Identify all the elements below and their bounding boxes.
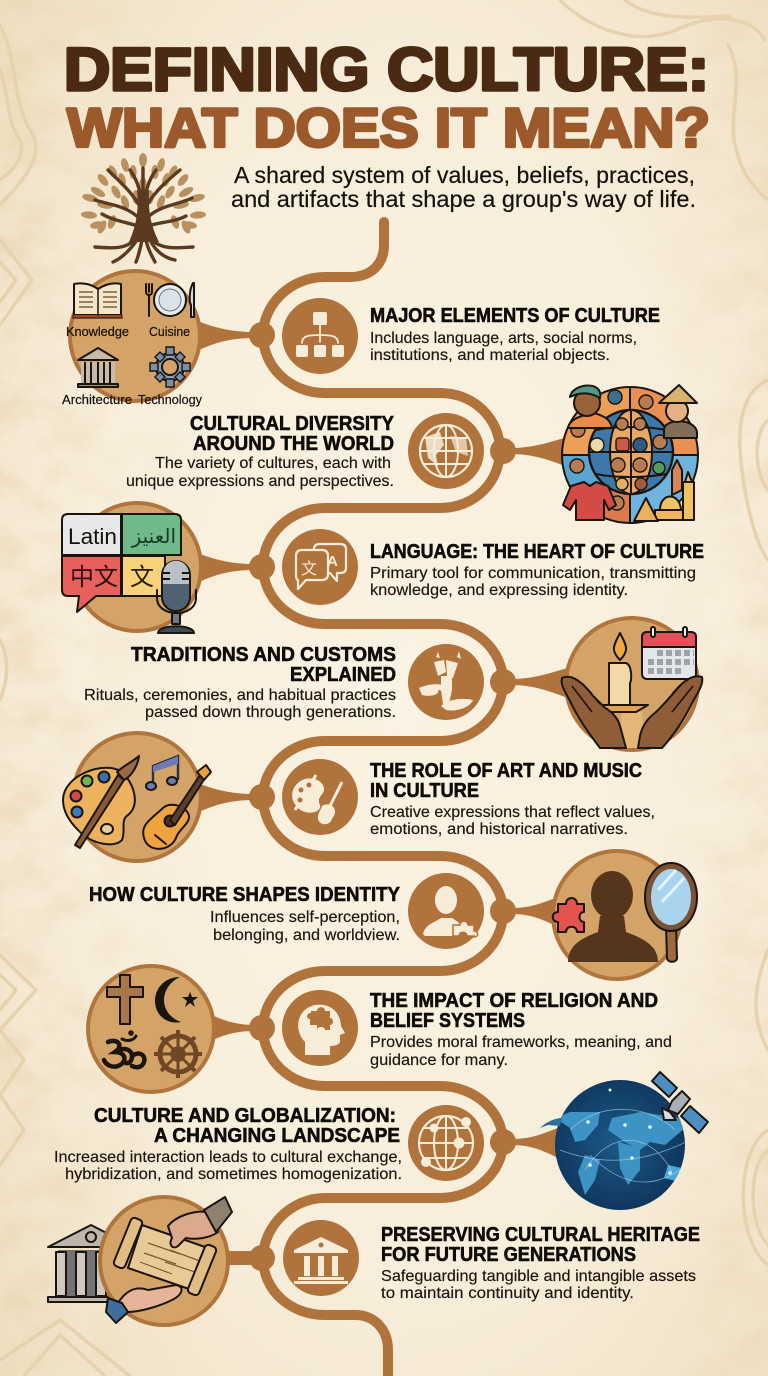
heading and description: HOW CULTURE SHAPES IDENTITY	[89, 884, 401, 906]
illustration: knowledge, cuisine, architecture, technology: Architecture	[62, 393, 132, 407]
icon: head with puzzle piece	[282, 990, 358, 1066]
heading and description: passed down through generations.	[145, 704, 396, 721]
icon: palette and guitar	[282, 759, 358, 835]
panel: religion and belief systems	[88, 966, 672, 1092]
red tunic	[563, 482, 616, 520]
heading and description: A CHANGING LANDSCAPE	[154, 1125, 400, 1147]
illustration: languages speech bubble and microphone: العنيز	[131, 524, 176, 548]
heading and description: PRESERVING CULTURAL HERITAGE	[381, 1224, 700, 1246]
icon: translation speech bubbles: 文	[301, 555, 317, 579]
heading and description: BELIEF SYSTEMS	[370, 1010, 525, 1032]
heading and description	[370, 990, 672, 1069]
illustration: knowledge, cuisine, architecture, technology: Technology	[138, 393, 203, 407]
heading and description	[370, 541, 704, 599]
heading and description: to maintain continuity and identity.	[381, 1285, 634, 1302]
crescent and star	[155, 977, 198, 1023]
illustration: peoples of the world	[562, 385, 698, 523]
title: DEFINING CULTURE:	[64, 36, 709, 103]
panel: language	[62, 503, 704, 633]
heading and description: LANGUAGE: THE HEART OF CULTURE	[370, 541, 704, 563]
icon: classical temple	[283, 1220, 359, 1296]
illustration: languages speech bubble and microphone: 文	[130, 557, 154, 592]
lower hand	[106, 1285, 182, 1323]
scroll	[113, 1217, 217, 1296]
heading and description: AROUND THE WORLD	[193, 433, 394, 455]
illustration: languages speech bubble and microphone: 中文	[70, 557, 118, 592]
icon: person with puzzle piece	[408, 873, 484, 949]
heading and description: emotions, and historical narratives.	[370, 821, 628, 838]
winding road path	[195, 222, 570, 1376]
heading and description: Provides moral frameworks, meaning, and	[370, 1034, 672, 1051]
illustration: temple, scroll and hands	[48, 1197, 232, 1325]
heading and description	[54, 1105, 402, 1183]
heading and description: Increased interaction leads to cultural exchange,	[54, 1149, 402, 1166]
microphone	[157, 561, 196, 633]
heading and description: EXPLAINED	[290, 664, 396, 686]
grey temple	[48, 1225, 120, 1302]
heading and description: MAJOR ELEMENTS OF CULTURE	[370, 305, 660, 327]
guitar	[143, 765, 211, 849]
title	[64, 36, 710, 158]
panel: major elements of culture	[62, 271, 660, 407]
illustration: languages speech bubble and microphone	[62, 503, 201, 633]
panel: art and music	[63, 733, 655, 861]
illustration: knowledge, cuisine, architecture, technology	[62, 271, 203, 407]
heading and description: Creative expressions that reflect values,	[370, 804, 655, 821]
heading and description: Primary tool for communication, transmitting	[370, 565, 696, 582]
illustration: religious symbols	[88, 966, 214, 1092]
heading and description: CULTURE AND GLOBALIZATION:	[94, 1105, 396, 1127]
buildings	[634, 460, 694, 521]
heading and description	[84, 644, 396, 721]
person in turban	[568, 385, 612, 428]
open hands	[562, 676, 702, 748]
heading and description: Rituals, ceremonies, and habitual practices	[84, 687, 396, 704]
heading and description: Safeguarding tangible and intangible assets	[381, 1268, 696, 1285]
om symbol	[104, 1032, 144, 1067]
heading and description	[370, 760, 655, 838]
illustration: palette, brush, notes and guitar	[63, 733, 211, 861]
panel: cultural diversity	[126, 385, 698, 523]
heading and description	[370, 305, 660, 364]
icon: network globe	[408, 1105, 484, 1181]
heading and description: FOR FUTURE GENERATIONS	[381, 1244, 636, 1266]
icon: translation speech bubbles	[282, 529, 358, 605]
heading and description: knowledge, and expressing identity.	[370, 582, 628, 599]
heading and description: IN CULTURE	[370, 780, 479, 802]
satellite	[652, 1072, 708, 1133]
heading and description: institutions, and material objects.	[370, 347, 610, 364]
person in conical hat	[659, 385, 697, 438]
subtitle: A shared system of values, beliefs, practices,	[234, 162, 695, 188]
heading and description: The variety of cultures, each with	[155, 455, 391, 472]
subtitle: and artifacts that shape a group's way of life.	[231, 186, 696, 212]
icon: tree of life	[81, 153, 206, 262]
heading and description: THE IMPACT OF RELIGION AND	[370, 990, 658, 1012]
heading and description: Includes language, arts, social norms,	[370, 330, 637, 347]
heading and description: TRADITIONS AND CUSTOMS	[131, 644, 396, 666]
paint brush	[75, 775, 124, 848]
illustration: knowledge, cuisine, architecture, technology: Cuisine	[149, 325, 190, 339]
title: WHAT DOES IT MEAN?	[67, 96, 710, 158]
illustration: knowledge, cuisine, architecture, technology: Knowledge	[66, 325, 129, 339]
icon: world globe	[408, 413, 484, 489]
palette	[63, 768, 135, 844]
illustration: languages speech bubble and microphone: Latin	[68, 524, 117, 549]
heading and description	[89, 884, 401, 944]
cross	[107, 975, 143, 1024]
heading and description: CULTURAL DIVERSITY	[190, 413, 395, 435]
illustration: silhouette, puzzle and mirror	[553, 851, 697, 979]
hand mirror	[645, 863, 697, 962]
panel: preserving cultural heritage	[48, 1197, 700, 1325]
upper hand	[168, 1197, 232, 1247]
heading and description: hybridization, and sometimes homogenization.	[65, 1166, 402, 1183]
heading and description	[126, 413, 395, 490]
illustration: digital globe and satellite	[540, 1072, 708, 1210]
subtitle	[231, 162, 696, 212]
icon: org chart	[282, 298, 358, 374]
heading and description: THE ROLE OF ART AND MUSIC	[370, 760, 642, 782]
icon: ritual candles and hands	[408, 644, 484, 720]
dharma wheel	[154, 1030, 202, 1078]
illustration: candle, calendar and open hands	[562, 618, 702, 750]
panel: culture and globalization	[54, 1072, 708, 1210]
candle	[596, 633, 648, 748]
music notes	[146, 756, 178, 790]
heading and description: belonging, and worldview.	[213, 927, 400, 944]
heading and description: unique expressions and perspectives.	[126, 473, 394, 490]
panel: traditions and customs	[84, 618, 702, 750]
heading and description: Influences self-perception,	[210, 909, 400, 926]
icon: translation speech bubbles: A	[327, 553, 338, 570]
heading and description: guidance for many.	[370, 1052, 508, 1069]
heading and description	[381, 1224, 700, 1302]
panel: culture shapes identity	[89, 851, 697, 979]
calendar	[642, 627, 696, 679]
